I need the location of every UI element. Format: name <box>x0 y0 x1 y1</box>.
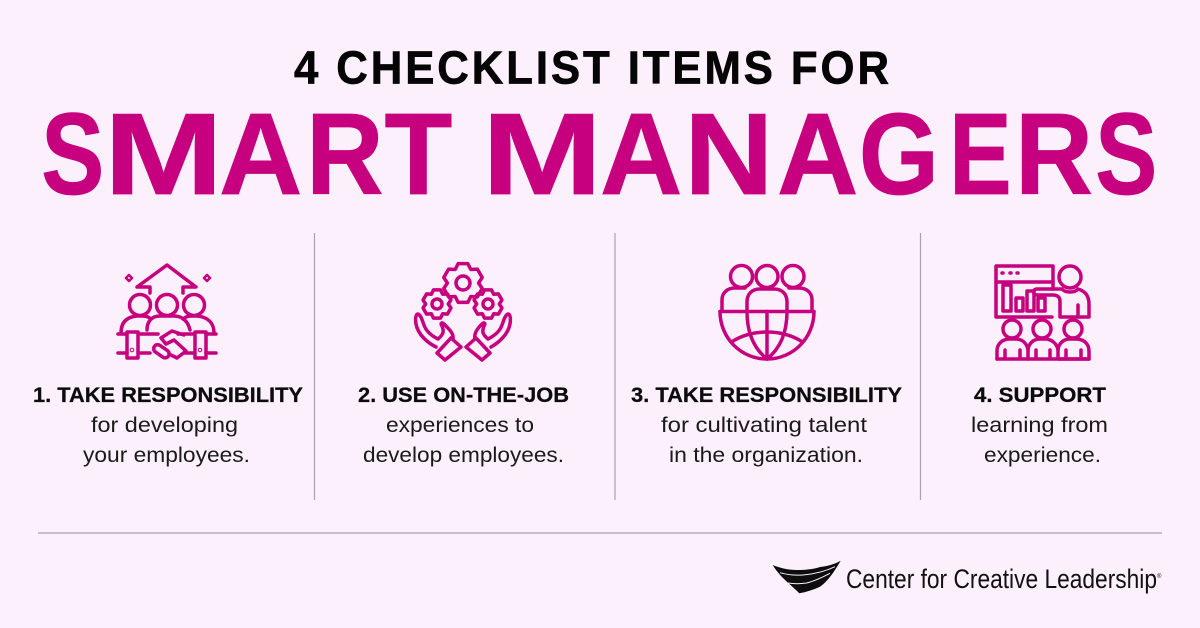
text: item 2 <box>358 384 569 467</box>
text: item 2: experiences to <box>386 414 534 437</box>
title: second line: M <box>104 89 223 219</box>
icon: people on globe <box>720 266 814 359</box>
title: second line: A <box>777 89 858 219</box>
text: item 1 <box>33 384 303 467</box>
title: second line: R <box>306 89 384 219</box>
text: item 4: 4. SUPPORT <box>974 384 1106 407</box>
text: item 4: learning from <box>971 414 1108 437</box>
icon: hands holding gears <box>416 264 510 360</box>
text: item 3 <box>631 384 902 467</box>
title: first line: 4 CHECKLIST ITEMS FOR <box>294 41 889 94</box>
panel: item 2 <box>358 264 569 467</box>
title: second line: T <box>384 89 452 219</box>
text: item 3: for cultivating talent <box>661 414 867 437</box>
panel: item 4 <box>971 266 1108 467</box>
icon: feather mark <box>773 561 841 593</box>
title: second line: N <box>684 89 774 219</box>
registered mark: ® <box>1157 573 1162 580</box>
title: second line: S <box>41 89 104 219</box>
title: second line: S <box>1095 89 1157 219</box>
text: item 4: experience. <box>984 444 1101 467</box>
text: item 1: 1. TAKE RESPONSIBILITY <box>33 384 303 407</box>
text: item 4 <box>971 384 1108 467</box>
text: item 2: develop employees. <box>363 444 564 467</box>
text: item 3: in the organization. <box>669 444 863 467</box>
text: item 1: your employees. <box>83 444 250 467</box>
title: second line: A <box>600 89 682 219</box>
text: item 3: 3. TAKE RESPONSIBILITY <box>631 384 902 407</box>
title: second line: A <box>219 89 302 219</box>
icon: team with arrow and handshake <box>118 265 216 359</box>
text: item 2: 2. USE ON-THE-JOB <box>358 384 569 407</box>
text: item 1: for developing <box>91 414 238 437</box>
panel: item 3 <box>631 266 902 467</box>
title: second line: E <box>949 89 1012 219</box>
logo: Center for Creative Leadership <box>773 561 1162 594</box>
title: second line: M <box>482 89 602 219</box>
icon: presenter with chart and audience <box>996 266 1089 359</box>
title: second line: G <box>859 89 939 219</box>
panel: item 1 <box>33 265 303 467</box>
title: second line: R <box>1015 89 1093 219</box>
